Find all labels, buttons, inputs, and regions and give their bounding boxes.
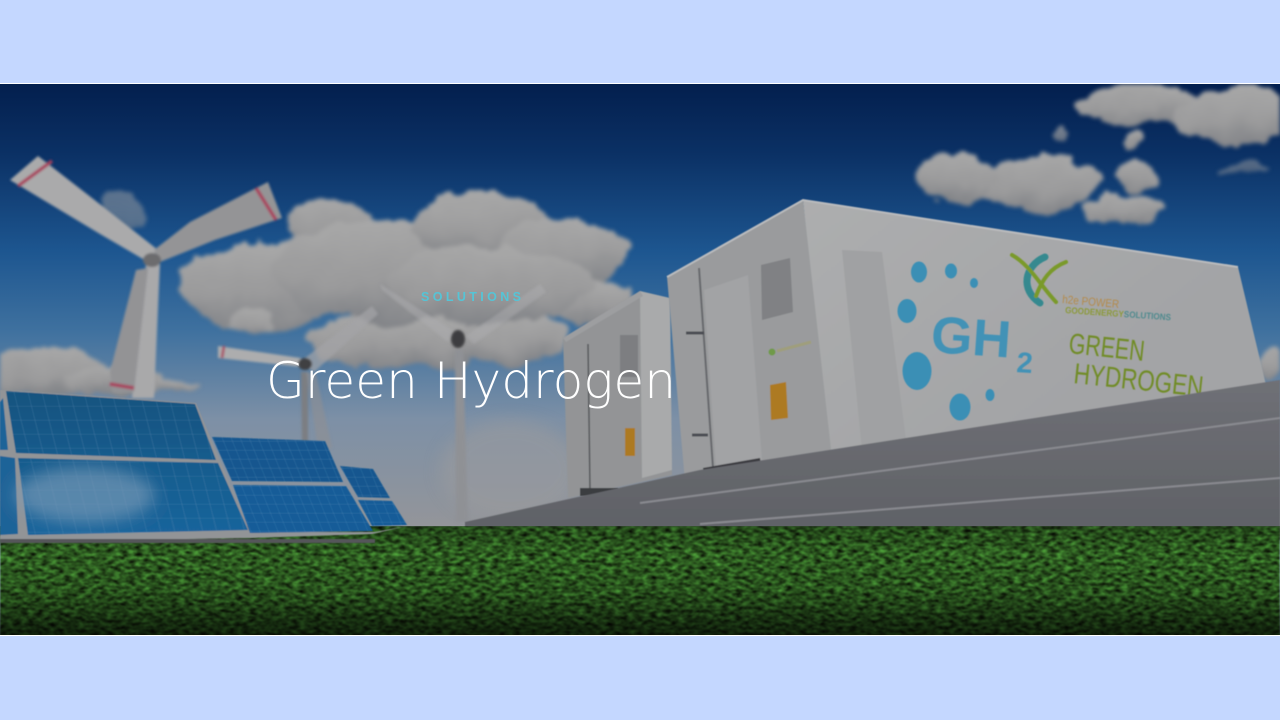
frame base: [0, 390, 407, 542]
door panel: [704, 275, 762, 468]
container branding: [898, 255, 1205, 420]
lower blade: [306, 372, 332, 448]
hub: [451, 330, 465, 348]
wind turbine left: [10, 156, 282, 398]
left face: [667, 200, 835, 482]
solar panels: [0, 390, 407, 543]
eyebrow label: SOLUTIONS: [421, 290, 521, 304]
bubbles: [898, 262, 994, 420]
clouds: [0, 85, 1280, 396]
warning sticker: [625, 428, 635, 456]
upper right blade: [154, 182, 282, 262]
back container: [563, 291, 672, 498]
grass: [0, 526, 1280, 636]
lower blade: [110, 268, 148, 392]
tower: [301, 372, 308, 442]
far panel: [340, 466, 390, 498]
side louvre panel: [842, 250, 906, 450]
door hinges: [686, 333, 708, 435]
hub: [143, 253, 161, 267]
upper left blade: [380, 284, 452, 342]
upper right blade: [466, 284, 546, 344]
white bottom rule: [0, 635, 1280, 636]
left blade: [218, 346, 312, 368]
red marker: [222, 346, 224, 358]
small green logo: [768, 348, 776, 356]
orange warning sticker: [770, 382, 788, 420]
concrete plinth: [465, 380, 1280, 540]
red tips: [18, 161, 276, 388]
wind turbine middle: [218, 306, 378, 448]
sky background: [0, 84, 1280, 536]
wind turbine right: [380, 284, 546, 522]
container branding: 2: [1016, 347, 1034, 380]
upper right clouds: [915, 85, 1280, 381]
top edge highlight: [667, 200, 1238, 277]
container branding: HYDROGEN: [1072, 358, 1205, 404]
hero banner image with title: [0, 83, 1280, 636]
door sill: [703, 458, 761, 476]
tower: [455, 350, 468, 522]
haze near horizon: [440, 420, 580, 520]
GREEN HYDROGEN label: GREEN: [1067, 328, 1146, 368]
front container: [667, 200, 1266, 482]
logo text: h2e POWER: [1062, 294, 1120, 311]
big central cloud: [176, 192, 632, 368]
title: Green Hydrogen: [266, 352, 676, 410]
container branding: GOODENERGYSOLUTIONS: [1065, 305, 1171, 322]
upper blade: [300, 306, 378, 372]
white top rule: [0, 83, 1280, 84]
side face: [803, 200, 1266, 458]
middle panel: [212, 437, 343, 482]
louvre vent: [761, 258, 793, 320]
cloud reflection: [15, 467, 155, 523]
GH2 label: GH: [929, 306, 1013, 370]
upper left blade: [10, 156, 158, 262]
left low cloud: [0, 195, 204, 396]
logo swoosh: [1012, 255, 1066, 303]
hub: [298, 358, 312, 370]
tower: [132, 264, 160, 398]
large panel: [6, 391, 216, 460]
door seam: [699, 268, 713, 468]
